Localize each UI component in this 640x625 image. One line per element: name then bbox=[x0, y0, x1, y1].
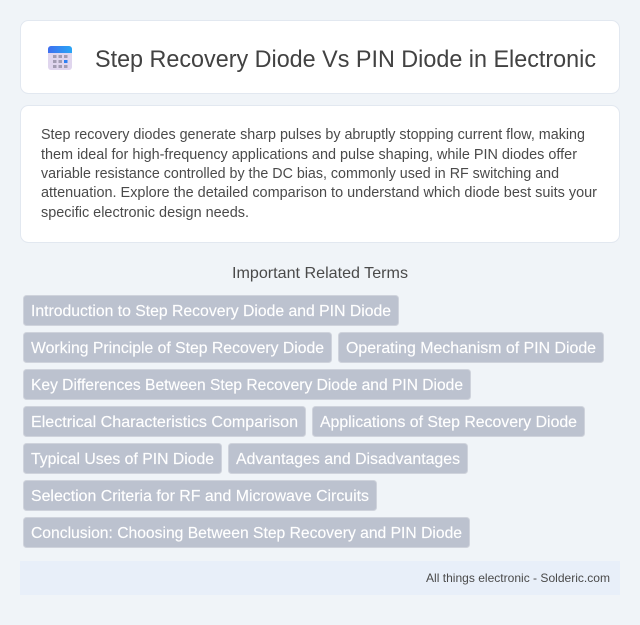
tag bbox=[24, 406, 306, 436]
footer: All things electronic - Solderic.com bbox=[426, 571, 610, 585]
text block: description: variable resistance controlled by the DC bias, commonly used in RF switching and bbox=[41, 166, 559, 182]
text block: description: them ideal for high-frequency applications and pulse shaping, while PIN diodes offer bbox=[41, 147, 577, 163]
panel: description bbox=[20, 106, 620, 242]
tag: Typical Uses of PIN Diode bbox=[31, 451, 214, 468]
title: Step Recovery Diode Vs PIN Diode in Electronic bbox=[95, 46, 596, 73]
text block: description: specific electronic design needs. bbox=[41, 205, 249, 221]
tag: Applications of Step Recovery Diode bbox=[320, 414, 577, 431]
tag: Introduction to Step Recovery Diode and PIN Diode bbox=[31, 303, 391, 320]
tag bbox=[24, 370, 470, 400]
text block: description: Step recovery diodes generate sharp pulses by abruptly stopping current flow, making bbox=[41, 127, 585, 143]
tag: Electrical Characteristics Comparison bbox=[31, 414, 298, 431]
header panel bbox=[20, 20, 620, 94]
tag bbox=[338, 332, 604, 362]
tag: Selection Criteria for RF and Microwave Circuits bbox=[31, 488, 369, 505]
tag bbox=[228, 444, 468, 474]
tag: Advantages and Disadvantages bbox=[236, 451, 460, 468]
tag: Conclusion: Choosing Between Step Recovery and PIN Diode bbox=[31, 525, 462, 542]
text block: description bbox=[41, 127, 597, 221]
footer bbox=[20, 561, 620, 595]
tag bbox=[24, 332, 332, 362]
tag list bbox=[24, 296, 604, 548]
icon: calendar bbox=[48, 46, 72, 70]
tag bbox=[24, 480, 376, 510]
tag: Operating Mechanism of PIN Diode bbox=[346, 340, 596, 357]
heading: related terms: Important Related Terms bbox=[232, 265, 408, 282]
tag: Working Principle of Step Recovery Diode bbox=[31, 340, 324, 357]
tag bbox=[312, 406, 584, 436]
tag: Key Differences Between Step Recovery Diode and PIN Diode bbox=[31, 377, 463, 394]
tag bbox=[24, 296, 398, 326]
text block: description: attenuation. Explore the detailed comparison to understand which diode best suits your bbox=[41, 185, 597, 201]
tag bbox=[24, 444, 222, 474]
tag bbox=[24, 518, 470, 548]
